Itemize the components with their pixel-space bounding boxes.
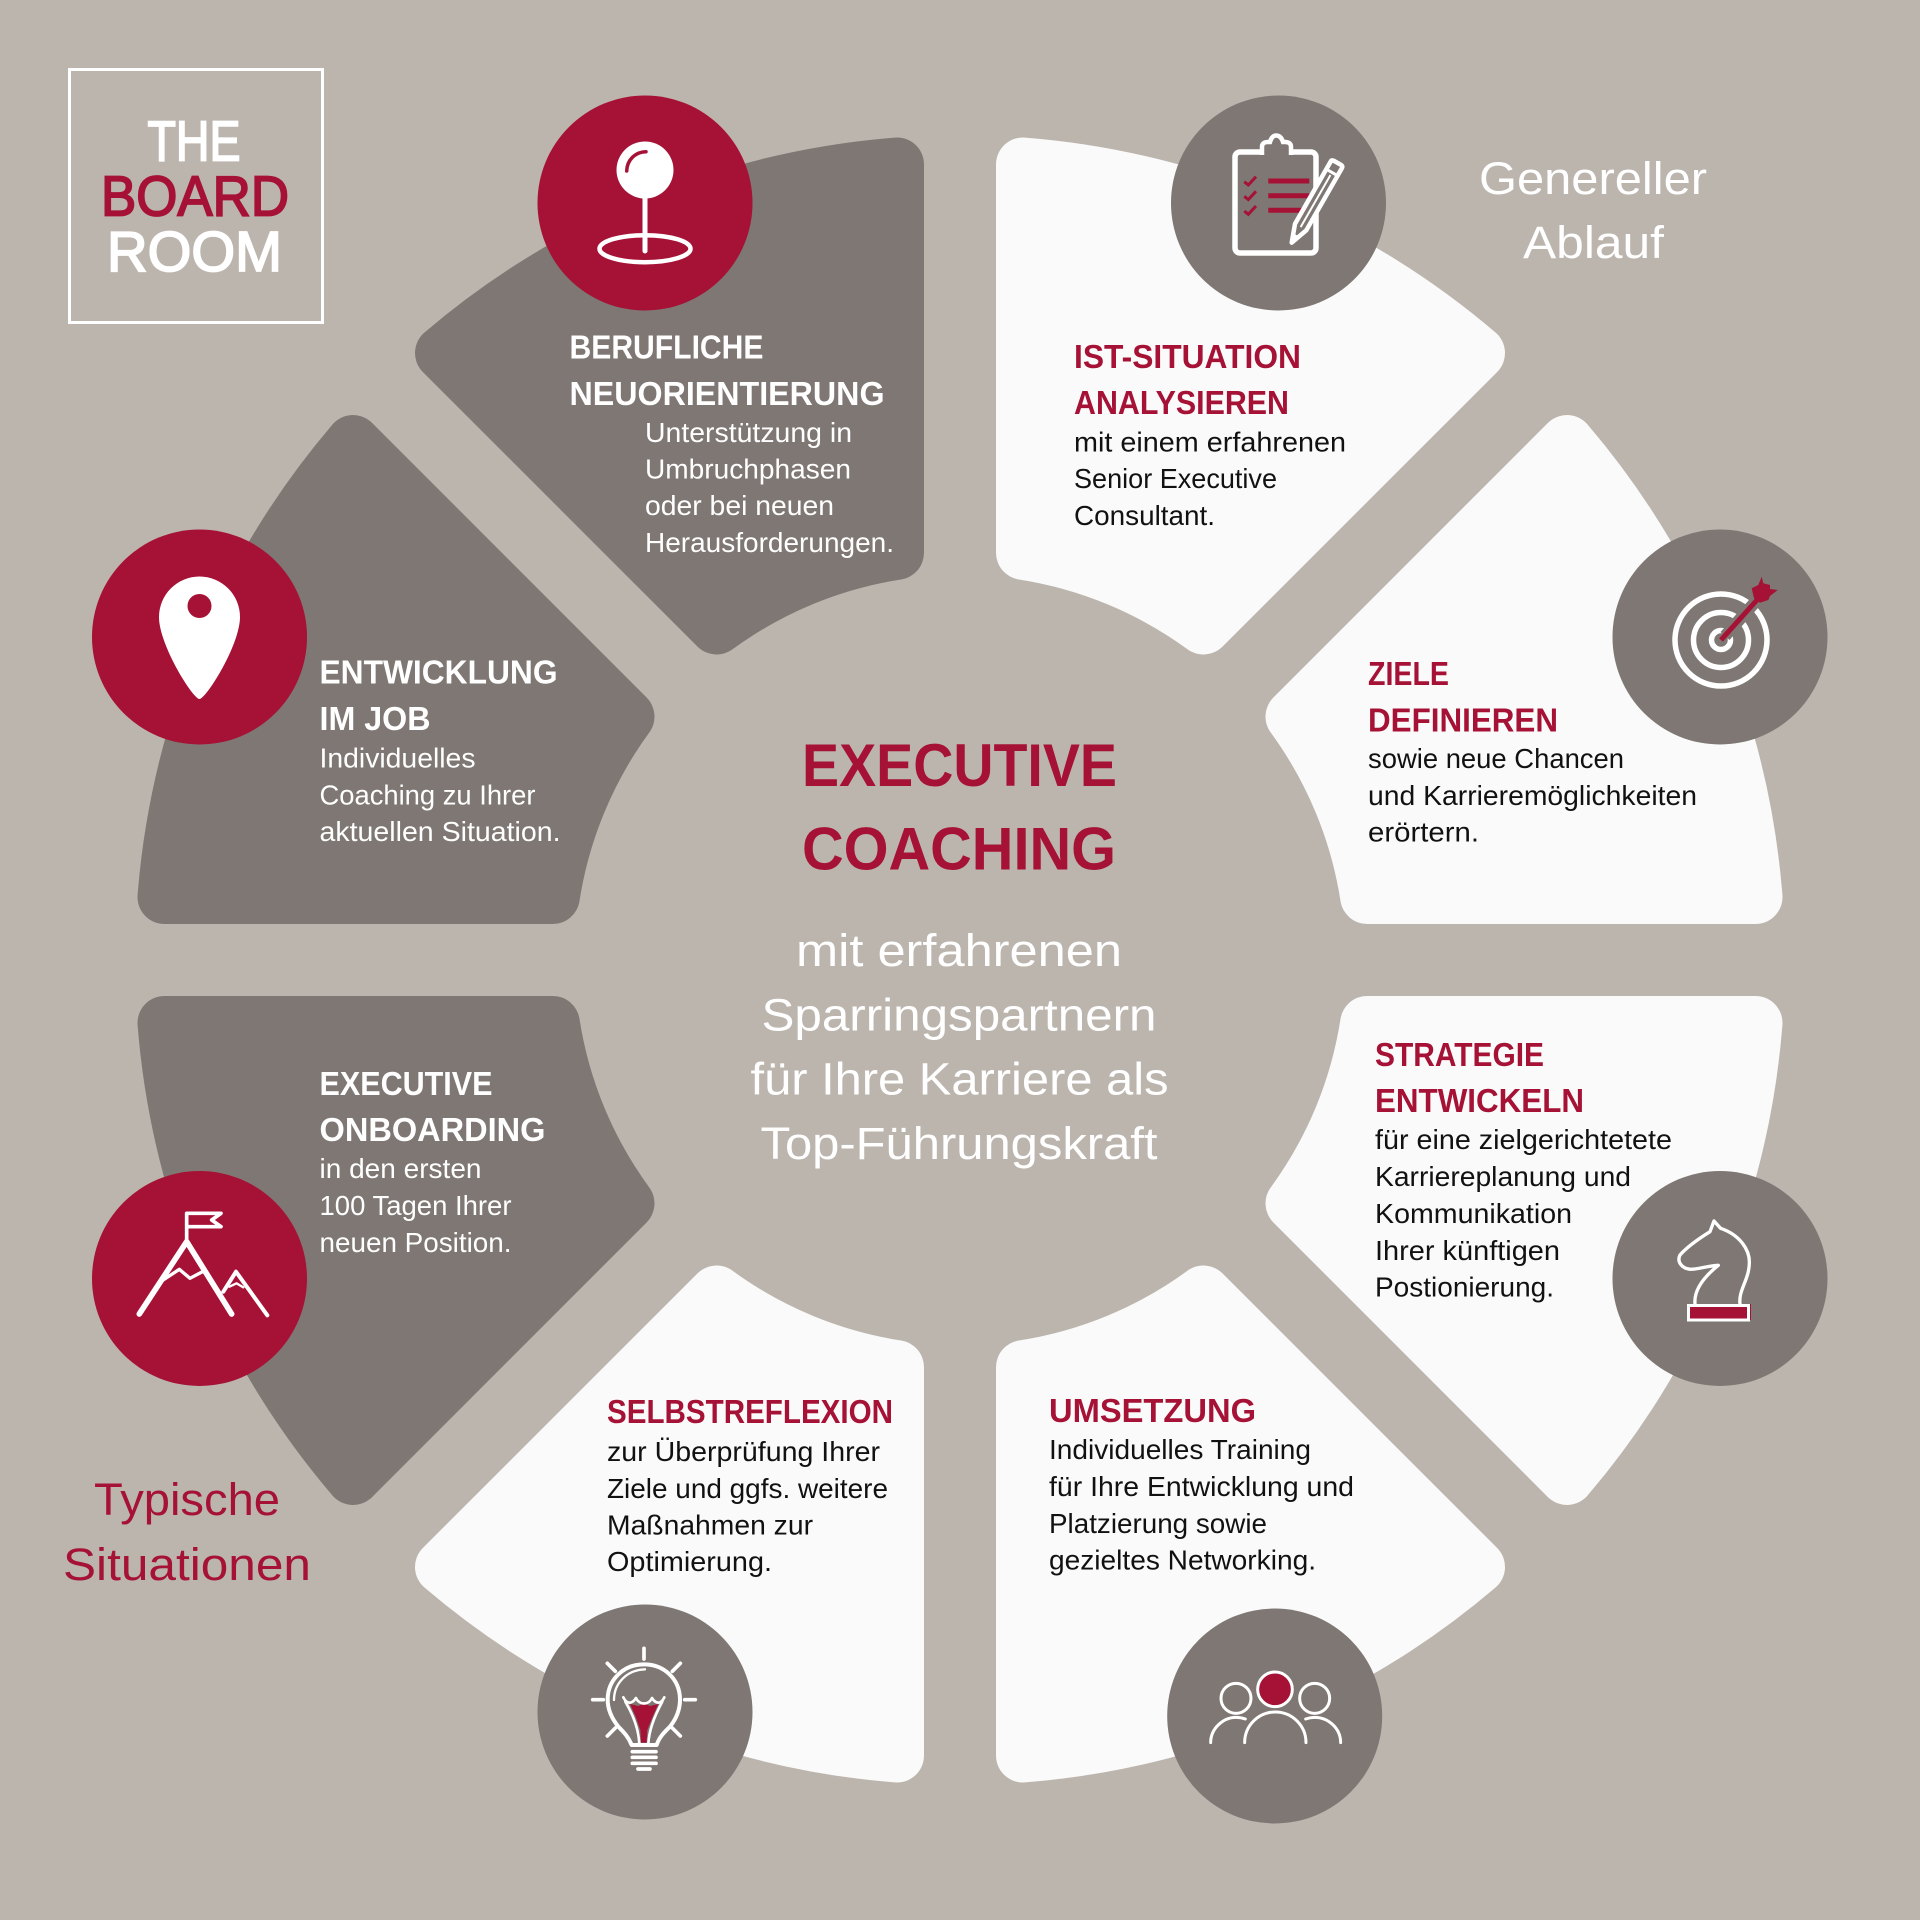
heading [570, 328, 884, 412]
body text: für Ihre Entwicklung und [1049, 1471, 1354, 1502]
panel: Executive Onboarding [92, 1023, 628, 1478]
label: Typische Situationen [63, 1474, 311, 1590]
body text: Platzierung sowie [1049, 1508, 1267, 1539]
heading [320, 1065, 546, 1148]
panel: Umsetzung [1023, 1292, 1478, 1824]
body text: Ihrer künftigen [1375, 1235, 1560, 1266]
body text: Postionierung. [1375, 1272, 1554, 1302]
logo: The Board Room: THE [148, 110, 240, 174]
center subtitle [750, 925, 1168, 1169]
center subtitle: Sparringspartnern [762, 990, 1156, 1040]
body text [607, 1436, 888, 1577]
icon: people group [1167, 1608, 1382, 1824]
label: Typische Situationen: Situationen [63, 1539, 311, 1590]
heading: NEUORIENTIERUNG [570, 375, 884, 412]
panel: Ziele definieren [1292, 442, 1828, 897]
center title: Executive Coaching: EXECUTIVE [802, 732, 1117, 799]
heading [1074, 338, 1301, 421]
body text: Karriereplanung und [1375, 1161, 1631, 1192]
panel: Selbstreflexion [442, 1292, 897, 1820]
heading: ZIELE [1368, 655, 1449, 692]
body text: Individuelles Training [1049, 1434, 1311, 1465]
panel: Ist-Situation analysieren [1023, 96, 1478, 628]
heading [320, 654, 558, 737]
icon: location marker [92, 530, 307, 744]
icon: light bulb [538, 1604, 752, 1820]
body text [320, 742, 560, 847]
heading [1368, 655, 1558, 738]
body text: Maßnahmen zur [607, 1510, 813, 1540]
center subtitle: mit erfahrenen [796, 925, 1122, 976]
body text: Unterstützung in [645, 417, 852, 448]
body text: erörtern. [1368, 816, 1479, 848]
body text: neuen Position. [320, 1227, 512, 1258]
body text: für eine zielgerichtetete [1375, 1124, 1672, 1155]
body text: Umbruchphasen [645, 454, 851, 484]
body text: mit einem erfahrenen [1074, 426, 1346, 458]
panel: Berufliche Neuorientierung [442, 96, 897, 628]
body text: aktuellen Situation. [320, 816, 560, 847]
body text: Ziele und ggfs. weitere [607, 1473, 888, 1504]
heading: SELBSTREFLEXION [607, 1393, 893, 1430]
heading: ENTWICKLUNG [320, 654, 558, 690]
body text: Senior Executive [1074, 463, 1277, 494]
body text: gezieltes Networking. [1049, 1544, 1316, 1576]
label: Genereller Ablauf: Genereller [1479, 153, 1707, 204]
body text [645, 417, 894, 558]
body text: Kommunikation [1375, 1198, 1572, 1229]
heading: STRATEGIE [1375, 1036, 1544, 1073]
label: Genereller Ablauf [1479, 153, 1707, 268]
body text: Individuelles [320, 742, 476, 774]
body text [1368, 743, 1697, 848]
center title: Executive Coaching [802, 732, 1117, 882]
body text: sowie neue Chancen [1368, 743, 1624, 774]
heading: BERUFLICHE [570, 328, 764, 366]
logo: The Board Room [70, 70, 322, 322]
heading: DEFINIEREN [1368, 702, 1558, 738]
body text: Consultant. [1074, 500, 1215, 531]
heading: ANALYSIEREN [1074, 384, 1289, 421]
heading: EXECUTIVE [320, 1065, 492, 1102]
label: Typische Situationen: Typische [94, 1474, 280, 1525]
body text [1375, 1124, 1672, 1302]
center subtitle: Top-Führungskraft [760, 1118, 1158, 1169]
logo: The Board Room: BOARD [101, 164, 289, 228]
panel: Strategie entwickeln [1292, 1023, 1828, 1478]
body text [320, 1153, 512, 1258]
body text [1074, 426, 1346, 531]
heading [1375, 1036, 1584, 1119]
panel: Entwicklung im Job [92, 442, 628, 897]
heading: IST-SITUATION [1074, 338, 1301, 375]
body text: oder bei neuen [645, 490, 834, 521]
icon: map pin on spot [538, 96, 752, 310]
body text: Optimierung. [607, 1546, 772, 1577]
body text: 100 Tagen Ihrer [320, 1190, 512, 1221]
icon: target with arrow [1612, 530, 1828, 744]
body text [1049, 1434, 1354, 1576]
body text: zur Überprüfung Ihrer [607, 1436, 880, 1467]
icon: mountain with flag [92, 1171, 307, 1386]
center subtitle: für Ihre Karriere als [750, 1054, 1168, 1104]
heading: UMSETZUNG [1049, 1392, 1256, 1429]
icon: chess knight [1612, 1171, 1828, 1386]
label: Genereller Ablauf: Ablauf [1523, 217, 1665, 268]
heading: IM JOB [320, 700, 430, 737]
center title: Executive Coaching: COACHING [802, 816, 1116, 882]
body text: Herausforderungen. [645, 527, 894, 558]
heading: ENTWICKELN [1375, 1082, 1584, 1119]
heading: ONBOARDING [320, 1111, 546, 1148]
body text: und Karrieremöglichkeiten [1368, 780, 1697, 811]
icon: clipboard [1171, 96, 1386, 310]
body text: Coaching zu Ihrer [320, 780, 536, 810]
logo: The Board Room: ROOM [107, 220, 282, 284]
body text: in den ersten [320, 1153, 482, 1184]
